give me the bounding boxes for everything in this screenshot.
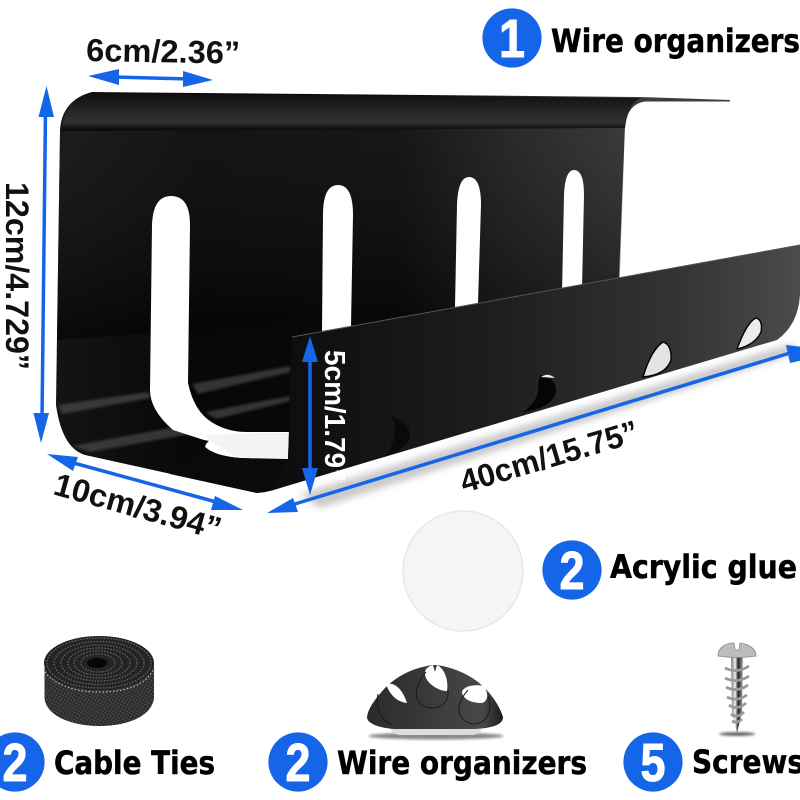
label: wire organizers: Wire organizers — [337, 744, 587, 782]
floor shadow under front wall — [300, 344, 800, 508]
dimension arrow: 12cm height — [34, 86, 54, 443]
legend item: 2 cable ties — [0, 732, 215, 793]
notch 2 white sliver — [541, 375, 555, 378]
icon: dome cable clip — [367, 665, 504, 740]
icon: screw — [718, 643, 756, 736]
back panel shading — [57, 128, 625, 340]
dimension arrow: 10cm depth — [47, 454, 243, 510]
dimension arrow: 5cm wall height — [302, 336, 318, 495]
dimension arrow: 40cm length — [267, 345, 800, 513]
slot 4 — [562, 170, 584, 294]
front wall top edge highlight — [292, 245, 800, 337]
reflections on tray floor — [58, 366, 290, 452]
acrylic glue disc — [403, 511, 523, 631]
notch 3 — [643, 342, 671, 377]
number badge 2 — [0, 732, 45, 793]
notch 4 — [737, 318, 761, 349]
product: cable tray illustration — [56, 92, 800, 508]
front wall — [270, 245, 800, 491]
dimension label: 6cm/2.36: 6cm/2.36” — [86, 32, 240, 71]
notch 2 — [523, 375, 556, 412]
foot where floor meets front wall — [170, 447, 300, 493]
icon: cable tie roll — [44, 636, 154, 726]
number badge 2: 2 — [2, 733, 28, 793]
legend item: 2 acrylic glue — [542, 540, 797, 601]
number badge 5: 5 — [640, 733, 666, 793]
number badge 2: 2 — [560, 541, 584, 601]
dimension label: 12cm/4.729: 12cm/4.729” — [0, 182, 35, 370]
dimension label: 40cm/15.75: 40cm/15.75” — [456, 413, 642, 500]
notch 1 — [385, 416, 410, 456]
number badge 5 — [623, 732, 683, 793]
dimension arrow: 6cm width — [88, 69, 213, 87]
dimension label: 10cm/3.94: 10cm/3.94” — [50, 466, 225, 547]
legend item: 1 wire organizers — [482, 8, 800, 69]
number badge 2 — [542, 540, 602, 601]
back panel and floor of tray — [56, 92, 730, 493]
slot 3 — [455, 177, 481, 307]
dimension label: 5cm/1.79: 5cm/1.79” — [318, 350, 350, 482]
slot 1 with floor cut-out — [150, 196, 289, 459]
number badge 1: 1 — [499, 9, 525, 69]
top fold band — [62, 93, 640, 131]
label: cable ties: Cable Ties — [54, 744, 215, 782]
number badge 1 — [482, 8, 542, 69]
legend item: 2 wire organizers — [268, 732, 587, 793]
legend item: 5 screws — [623, 732, 800, 793]
slot 1 floor shading — [205, 433, 288, 458]
slot 2 — [322, 185, 353, 331]
number badge 2 — [268, 732, 328, 793]
number badge 2: 2 — [286, 733, 310, 793]
